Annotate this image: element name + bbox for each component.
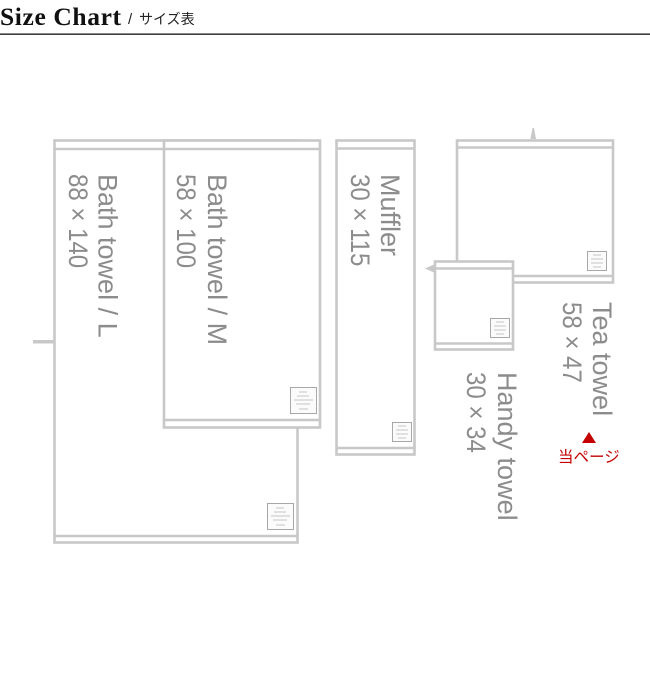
title: /: [128, 11, 133, 28]
label tag: [268, 504, 294, 530]
callout: current page: [558, 432, 620, 466]
panel: tea towel: [457, 128, 617, 416]
label tag: [588, 252, 606, 270]
callout: current page: 当ページ: [558, 448, 620, 466]
title: サイズ表: [139, 11, 195, 27]
size text: 58 × 47: [557, 302, 586, 383]
panel: muffler: [336, 140, 415, 454]
label tag: [490, 318, 510, 338]
title: [0, 2, 195, 31]
name text: Bath towel / L: [92, 174, 122, 338]
size text: 88 × 140: [63, 174, 92, 268]
size text: 30 × 34: [461, 372, 490, 453]
name text: Handy towel: [492, 372, 522, 521]
header rule: [0, 34, 650, 35]
hanging loop: [425, 264, 435, 273]
size text: 58 × 100: [171, 174, 200, 268]
label tag: [392, 422, 412, 442]
size text: 30 × 115: [345, 174, 374, 266]
hanging loop: [530, 128, 536, 139]
panel: bath towel L: [33, 140, 298, 542]
name text: Muffler: [375, 174, 405, 256]
name text: Tea towel: [587, 302, 617, 416]
hanging loop: [33, 340, 54, 344]
panel: bath towel M: [164, 140, 321, 428]
name text: Bath towel / M: [202, 174, 232, 345]
title: Size Chart: [0, 2, 122, 31]
panel: handy towel: [425, 262, 522, 521]
icon: red triangle: [582, 432, 596, 443]
label tag: [290, 388, 316, 414]
